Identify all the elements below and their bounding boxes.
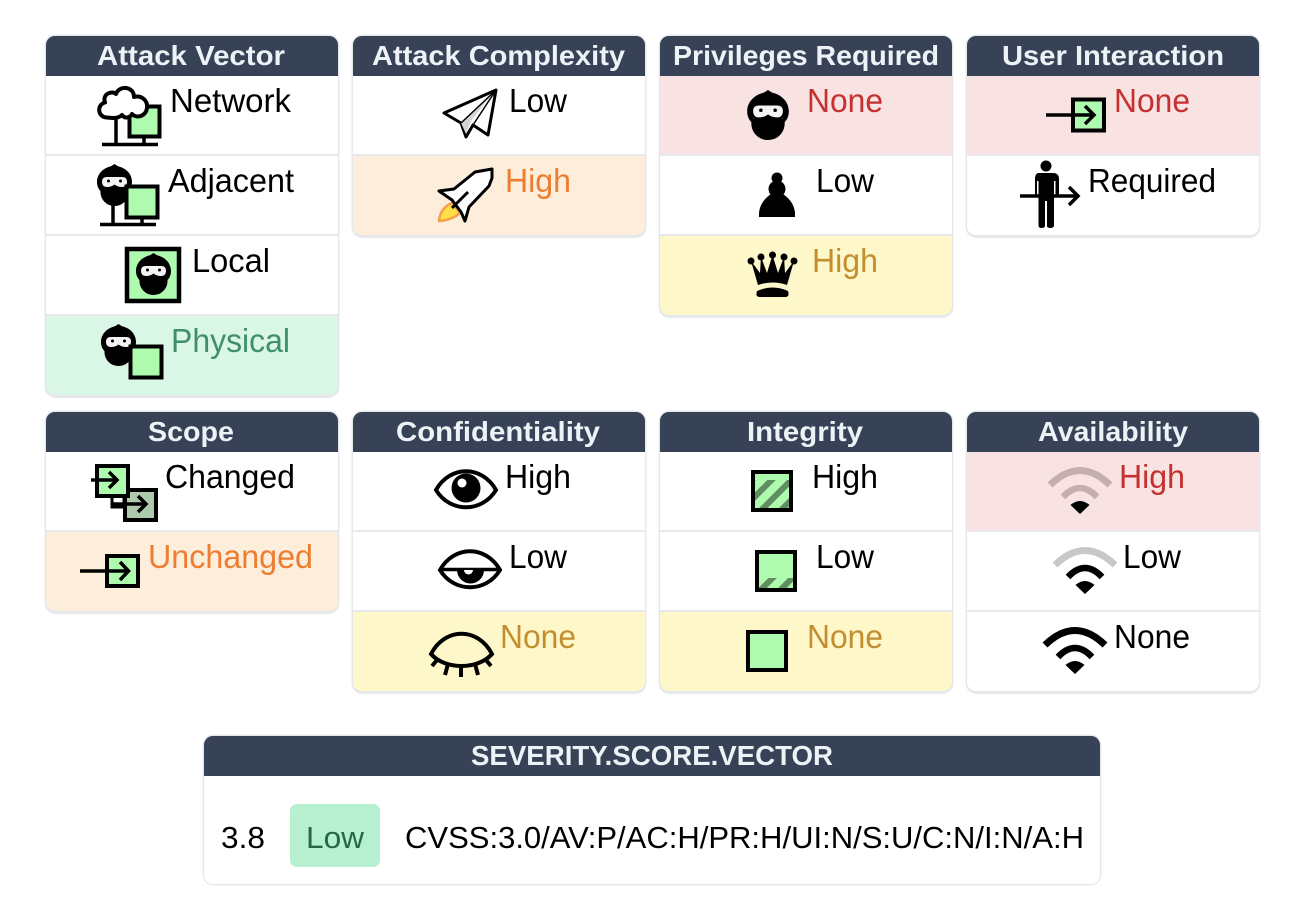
row: Local: Local bbox=[192, 242, 270, 279]
icon: paper plane bbox=[444, 90, 496, 137]
icon: two boxes with arrows bbox=[91, 466, 156, 520]
heading: Attack Vector: Attack Vector bbox=[97, 40, 285, 71]
row: Changed bbox=[46, 452, 338, 530]
icon: open eye bbox=[436, 471, 496, 507]
icon: ninja and adjacent monitor bbox=[97, 164, 158, 224]
icon: ninja and box bbox=[101, 324, 162, 378]
row: Low: Low bbox=[509, 82, 567, 119]
heading: Confidentiality bbox=[353, 412, 645, 452]
heading: SEVERITY.SCORE.VECTOR bbox=[204, 736, 1100, 776]
icon: closed eye bbox=[431, 634, 492, 677]
row: None bbox=[967, 76, 1259, 154]
panel: Attack Complexity bbox=[352, 34, 646, 238]
heading: Availability bbox=[967, 412, 1259, 452]
heading: Integrity bbox=[660, 412, 952, 452]
icon: cloud tree and monitor bbox=[99, 88, 160, 144]
row: High bbox=[660, 452, 952, 530]
row: None bbox=[660, 612, 952, 691]
row: Low: Low bbox=[816, 538, 874, 575]
row: Low bbox=[967, 532, 1259, 610]
row: Required: Required bbox=[1088, 162, 1216, 199]
row: Adjacent bbox=[46, 156, 338, 234]
panel: Confidentiality bbox=[352, 410, 646, 694]
icon: slightly hatched box bbox=[757, 552, 795, 590]
row: High bbox=[353, 452, 645, 530]
icon: wifi weak bbox=[1050, 470, 1110, 514]
heading: User Interaction bbox=[967, 36, 1259, 76]
row: High: High bbox=[505, 458, 571, 495]
heading: Attack Complexity bbox=[353, 36, 645, 76]
row: Low bbox=[353, 76, 645, 154]
icon: mostly hatched box bbox=[753, 472, 791, 510]
row: Network bbox=[46, 76, 338, 154]
row: Unchanged: Unchanged bbox=[148, 538, 313, 575]
row: High: High bbox=[505, 162, 571, 199]
heading: Scope: Scope bbox=[148, 416, 234, 447]
row: Low: Low bbox=[1123, 538, 1181, 575]
row: None: None bbox=[1114, 82, 1190, 119]
row: Unchanged bbox=[46, 532, 338, 611]
row: None: None bbox=[807, 618, 883, 655]
row: Low bbox=[660, 532, 952, 610]
panel: Privileges Required bbox=[658, 34, 954, 318]
icon: queen bbox=[748, 252, 798, 297]
panel: Availability bbox=[966, 410, 1260, 694]
panel: Attack Vector bbox=[44, 34, 340, 398]
row: Changed: Changed bbox=[165, 458, 295, 495]
panel: User Interaction bbox=[966, 34, 1260, 238]
panel: Integrity bbox=[658, 410, 954, 694]
icon: arrow into box bbox=[80, 556, 138, 586]
icon: plain box bbox=[748, 632, 786, 670]
icon: pawn bbox=[759, 172, 795, 217]
heading: Attack Vector bbox=[46, 36, 338, 76]
row: High: High bbox=[812, 242, 878, 279]
heading: Scope bbox=[46, 412, 338, 452]
icon: half-closed eye bbox=[440, 551, 500, 587]
panel: severity score vector bbox=[202, 734, 1102, 886]
row: Required bbox=[967, 156, 1259, 235]
heading: Attack Complexity: Attack Complexity bbox=[372, 40, 625, 71]
row: High bbox=[353, 156, 645, 235]
heading: SEVERITY.SCORE.VECTOR: SEVERITY.SCORE.VECTOR bbox=[471, 740, 833, 771]
row: Physical bbox=[46, 316, 338, 395]
icon: arrow into box bbox=[1046, 100, 1104, 130]
row: None bbox=[967, 612, 1259, 691]
row: Low: Low bbox=[509, 538, 567, 575]
row: High: High bbox=[1119, 458, 1185, 495]
severity badge bbox=[290, 804, 380, 867]
row: None: None bbox=[1114, 618, 1190, 655]
vector string: CVSS:3.0/AV:P/AC:H/PR:H/UI:N/S:U/C:N/I:N/A:H bbox=[405, 820, 1084, 855]
severity body bbox=[204, 776, 1100, 884]
icon: ninja bbox=[747, 90, 789, 140]
row: Network: Network bbox=[170, 82, 291, 119]
row: High: High bbox=[812, 458, 878, 495]
row: Low bbox=[660, 156, 952, 234]
icon: ninja in box bbox=[127, 249, 179, 301]
row: Low bbox=[353, 532, 645, 610]
icon: rocket bbox=[439, 169, 492, 221]
panel: Scope bbox=[44, 410, 340, 614]
icon: person with arrow bbox=[1020, 160, 1078, 228]
row: None: None bbox=[500, 618, 576, 655]
row: Local bbox=[46, 236, 338, 314]
row: None: None bbox=[807, 82, 883, 119]
heading: User Interaction: User Interaction bbox=[1002, 40, 1224, 71]
row: High bbox=[967, 452, 1259, 530]
icon: wifi full bbox=[1045, 630, 1105, 674]
score: 3.8 bbox=[221, 820, 265, 855]
icon: wifi medium bbox=[1055, 550, 1115, 594]
heading: Integrity: Integrity bbox=[747, 416, 863, 447]
heading: Availability: Availability bbox=[1038, 416, 1188, 447]
severity badge: Low bbox=[306, 820, 365, 855]
row: Adjacent: Adjacent bbox=[168, 162, 294, 199]
heading: Confidentiality: Confidentiality bbox=[396, 416, 600, 447]
heading: Privileges Required: Privileges Required bbox=[673, 40, 939, 71]
heading: Privileges Required bbox=[660, 36, 952, 76]
row: High bbox=[660, 236, 952, 315]
row: None bbox=[660, 76, 952, 154]
row: Low: Low bbox=[816, 162, 874, 199]
row: None bbox=[353, 612, 645, 691]
row: Physical: Physical bbox=[171, 322, 290, 359]
